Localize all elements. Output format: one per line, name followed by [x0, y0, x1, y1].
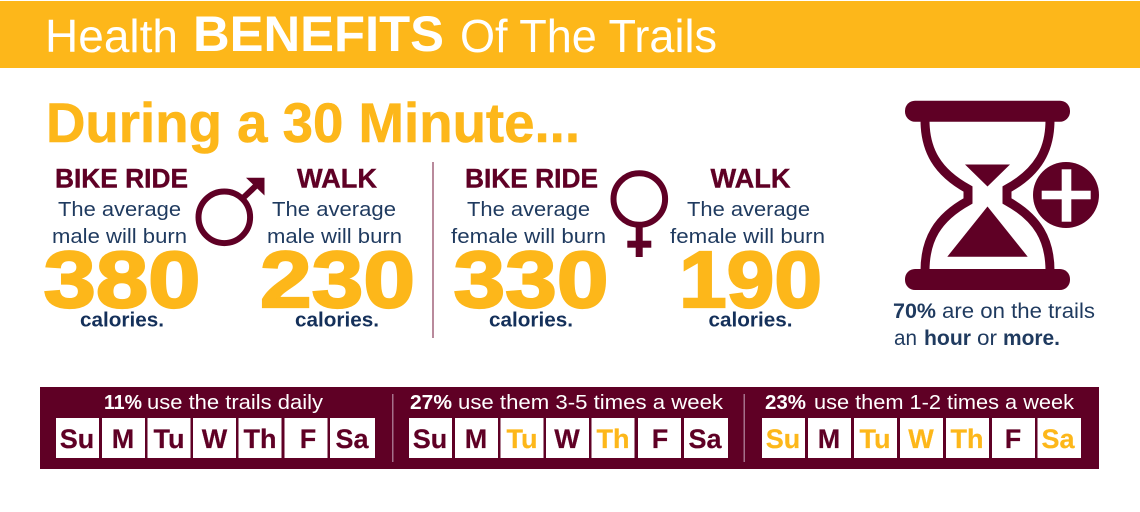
- male walk stat: male will burn: [267, 226, 402, 248]
- female bike ride stat: [451, 164, 608, 332]
- group: 1-2 times a week: Sa: [1041, 424, 1075, 454]
- divider: [432, 162, 434, 338]
- icon: hourglass with plus: [905, 101, 1101, 290]
- group: 1-2 times a week: W: [908, 424, 934, 454]
- female bike ride stat: The average: [467, 199, 590, 221]
- male walk stat: calories.: [295, 310, 379, 332]
- female walk stat: [670, 164, 825, 332]
- group: 1-2 times a week: F: [1005, 424, 1021, 454]
- group: daily use: M: [112, 424, 134, 454]
- group: 3-5 times a week: Su: [413, 424, 447, 454]
- group: 3-5 times a week: Tu: [507, 424, 537, 454]
- female bike ride stat: 330: [454, 235, 608, 324]
- group: daily use: Tu: [154, 424, 184, 454]
- group: 3-5 times a week: F: [652, 424, 668, 454]
- female walk stat: 190: [679, 235, 822, 324]
- icon: female symbol: [614, 173, 665, 257]
- male walk stat: The average: [272, 199, 396, 221]
- group: 1-2 times a week: Th: [950, 424, 984, 454]
- female walk stat: female will burn: [670, 226, 825, 248]
- male bike ride stat: male will burn: [52, 226, 187, 248]
- male bike ride stat: calories.: [80, 310, 164, 332]
- title banner: BENEFITS: [193, 6, 444, 62]
- group: daily use: use the trails daily: [147, 392, 323, 414]
- title banner: Health: [45, 10, 178, 62]
- group: 3-5 times a week: M: [465, 424, 487, 454]
- text: 70 percent on the trails: 70%: [893, 300, 936, 323]
- male bike ride stat: 380: [44, 235, 200, 324]
- group: daily use: W: [202, 424, 228, 454]
- group: 3-5 times a week: [409, 392, 728, 458]
- group: 1-2 times a week: use them 1-2 times a week: [814, 392, 1075, 414]
- group: 1-2 times a week: M: [818, 424, 840, 454]
- group: 3-5 times a week: use them 3-5 times a week: [458, 392, 724, 414]
- group: daily use: Sa: [335, 424, 369, 454]
- text: 70 percent on the trails: an: [894, 327, 917, 350]
- group: 3-5 times a week: Th: [596, 424, 630, 454]
- group: 1-2 times a week: Tu: [860, 424, 890, 454]
- group: 3-5 times a week: W: [554, 424, 580, 454]
- female walk stat: The average: [687, 199, 810, 221]
- group: daily use: Su: [60, 424, 94, 454]
- female bike ride stat: female will burn: [451, 226, 606, 248]
- text: 70 percent on the trails: more.: [1003, 327, 1060, 350]
- group: 1-2 times a week: Su: [766, 424, 800, 454]
- female bike ride stat: BIKE RIDE: [465, 164, 598, 194]
- text: 70 percent on the trails: hour: [924, 327, 971, 350]
- male walk stat: 230: [260, 235, 415, 324]
- male walk stat: [260, 164, 415, 332]
- group: daily use: [56, 392, 375, 458]
- icon: male symbol: [198, 178, 264, 243]
- male bike ride stat: The average: [58, 199, 181, 221]
- text: 70 percent on the trails: are on the trails: [942, 300, 1095, 323]
- title banner: Of The Trails: [460, 10, 717, 62]
- group: daily use: Th: [244, 424, 276, 454]
- group: 3-5 times a week: 27%: [410, 392, 452, 414]
- title banner: [0, 1, 1140, 68]
- female walk stat: calories.: [708, 310, 792, 332]
- female walk stat: WALK: [710, 164, 791, 194]
- panel: weekly trail use: [40, 387, 1099, 469]
- group: 1-2 times a week: 23%: [765, 392, 806, 414]
- male bike ride stat: BIKE RIDE: [55, 164, 188, 194]
- text: 70 percent on the trails: [893, 300, 1095, 350]
- group: 3-5 times a week: Sa: [688, 424, 722, 454]
- female bike ride stat: calories.: [489, 310, 573, 332]
- group: daily use: F: [300, 424, 316, 454]
- group: daily use: 11%: [104, 392, 142, 414]
- male walk stat: WALK: [297, 164, 378, 194]
- group: 1-2 times a week: [762, 392, 1081, 458]
- heading: during a 30 minute: During a 30 Minute...: [46, 91, 580, 154]
- text: 70 percent on the trails: or: [977, 327, 997, 350]
- male bike ride stat: [44, 164, 200, 332]
